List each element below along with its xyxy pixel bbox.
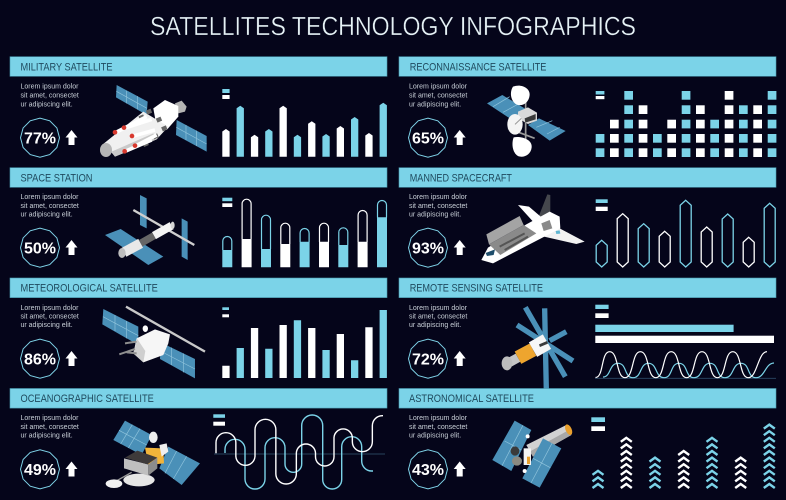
icon: reconnaissance satellite	[487, 86, 566, 157]
text block: Lorem ipsum dolor	[409, 415, 468, 422]
text block: sit amet, consectet	[20, 314, 79, 320]
heading: SPACE STATION	[20, 172, 93, 184]
heading	[10, 388, 387, 408]
heading	[399, 168, 776, 187]
chart: stacked squares	[596, 91, 776, 157]
percentage badge: 50%	[24, 240, 56, 257]
percentage badge: 65%	[412, 130, 444, 147]
percentage badge: 86%	[24, 351, 56, 368]
heading	[399, 57, 776, 76]
icon: space station	[105, 195, 194, 265]
panel: reconnaissance satellite	[399, 57, 776, 157]
percentage badge: 43%	[412, 462, 444, 479]
heading: OCEANOGRAPHIC SATELLITE	[20, 393, 154, 405]
heading: REMOTE SENSING SATELLITE	[410, 283, 543, 295]
icon: up arrow	[454, 351, 466, 366]
heading: MANNED SPACECRAFT	[410, 172, 512, 184]
text block: ur adipiscing elit.	[20, 433, 73, 440]
text block: ur adipiscing elit.	[409, 433, 461, 440]
icon: up arrow	[454, 462, 466, 476]
chart: flat bars	[222, 307, 387, 378]
icon: up arrow	[66, 462, 78, 476]
heading: METEOROLOGICAL SATELLITE	[20, 283, 158, 295]
panel: meteorological satellite	[10, 278, 387, 378]
text block: Lorem ipsum dolor	[20, 305, 79, 312]
heading: MILITARY SATELLITE	[20, 61, 112, 73]
heading	[10, 168, 387, 187]
panel: astronomical satellite	[399, 388, 776, 489]
icon: space shuttle	[481, 194, 585, 263]
text block: ur adipiscing elit.	[20, 212, 73, 219]
text block: sit amet, consectet	[20, 92, 79, 100]
chart: hexagon outlines	[596, 199, 775, 267]
icon: up arrow	[454, 240, 466, 255]
chart: pointed bars	[222, 89, 387, 157]
panel: oceanographic satellite	[10, 388, 387, 489]
panel: space station	[10, 168, 387, 267]
icon: meteorological satellite	[102, 307, 205, 378]
text block: ur adipiscing elit.	[20, 102, 73, 108]
text block: ur adipiscing elit.	[409, 322, 461, 329]
title: SATELLITES TECHNOLOGY INFOGRAPHICS	[150, 11, 636, 41]
text block: ur adipiscing elit.	[409, 212, 461, 219]
text block: sit amet, consectet	[409, 424, 467, 431]
text block: Lorem ipsum dolor	[20, 194, 79, 201]
percentage badge	[408, 118, 448, 157]
icon: military satellite	[100, 85, 207, 157]
icon: up arrow	[66, 240, 78, 255]
text block: Lorem ipsum dolor	[20, 415, 79, 422]
text block: sit amet, consectet	[20, 203, 79, 210]
heading: ASTRONOMICAL SATELLITE	[409, 393, 534, 405]
percentage badge: 93%	[412, 240, 444, 257]
heading	[10, 57, 387, 76]
text block: sit amet, consectet	[409, 203, 467, 210]
heading	[399, 278, 776, 298]
text block: sit amet, consectet	[409, 314, 467, 320]
icon: astronomical satellite	[492, 421, 574, 488]
text block: sit amet, consectet	[20, 424, 79, 431]
text block: Lorem ipsum dolor	[409, 305, 468, 312]
percentage badge	[408, 339, 448, 378]
percentage badge	[408, 450, 448, 489]
panel: manned spacecraft	[399, 168, 776, 267]
icon: oceanographic satellite	[106, 421, 200, 488]
text block: Lorem ipsum dolor	[20, 84, 79, 90]
percentage badge	[20, 228, 60, 267]
text block: sit amet, consectet	[409, 92, 467, 100]
chart: filled tubes	[222, 198, 387, 267]
panel: military satellite	[10, 57, 387, 157]
text block: ur adipiscing elit.	[20, 322, 73, 329]
text block: ur adipiscing elit.	[409, 102, 461, 108]
percentage badge	[408, 228, 448, 267]
heading	[10, 278, 387, 298]
percentage badge	[20, 339, 60, 378]
text block: Lorem ipsum dolor	[409, 194, 468, 201]
icon: remote sensing satellite	[502, 307, 573, 390]
percentage badge: 77%	[24, 130, 56, 147]
percentage badge: 72%	[412, 351, 444, 368]
icon: up arrow	[66, 130, 78, 145]
percentage badge	[20, 118, 60, 157]
chart: chevron columns	[591, 417, 775, 488]
chart: bars and waves	[595, 305, 776, 378]
percentage badge	[20, 450, 60, 489]
panel: remote sensing satellite	[399, 278, 776, 390]
percentage badge: 49%	[24, 462, 56, 479]
chart: crossing lines	[213, 414, 385, 489]
heading	[399, 388, 776, 408]
heading: RECONNAISSANCE SATELLITE	[410, 61, 546, 73]
text block: Lorem ipsum dolor	[409, 84, 468, 90]
icon: up arrow	[66, 351, 78, 366]
icon: up arrow	[454, 130, 466, 145]
